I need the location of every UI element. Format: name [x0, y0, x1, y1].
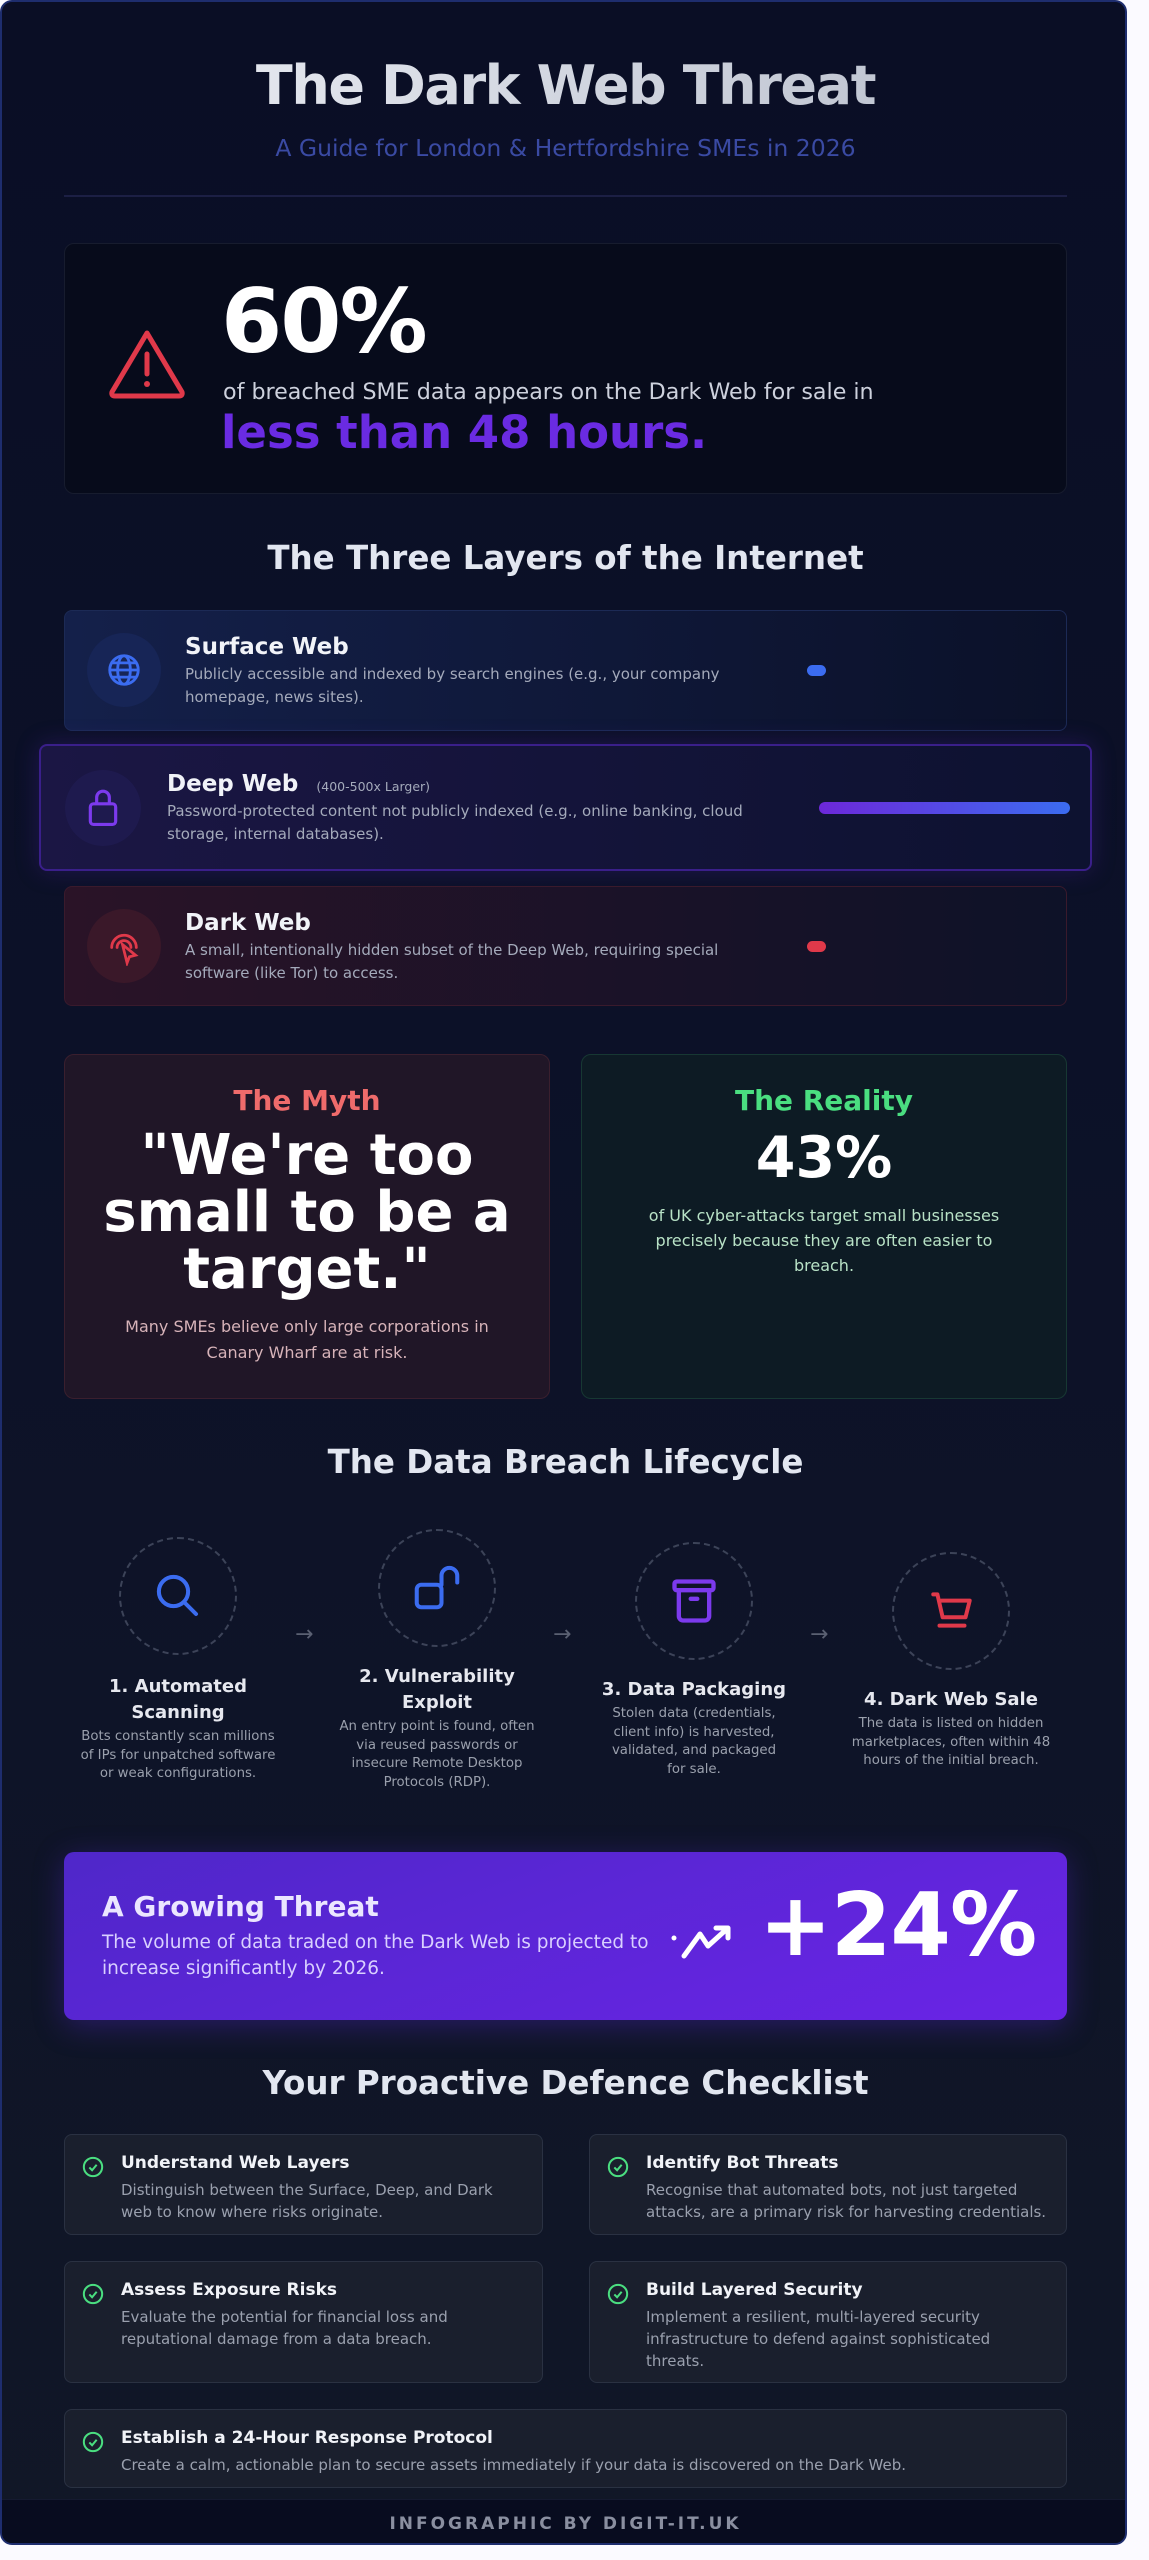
layer: dark web [64, 886, 1067, 1006]
growing threat title: A Growing Threat [102, 1890, 379, 1923]
icon: check [608, 2284, 628, 2304]
icon: check [82, 2156, 104, 2178]
reality description: of UK cyber-attacks target small businesses precisely because they are often easier to breach. [649, 1206, 999, 1275]
step 3: 3. Data Packaging [602, 1679, 786, 1700]
bar: deep size [819, 802, 1070, 814]
deep title: Deep Web (400-500x Larger) [167, 771, 430, 797]
panel: key stat [64, 243, 1067, 494]
step 4: The data is listed on hidden marketplaces, often within 48 hours of the initial breach. [852, 1716, 1050, 1768]
growth stat: +24% [759, 1874, 1036, 1976]
step 4: 4. Dark Web Sale [864, 1689, 1038, 1710]
step 1 [81, 1537, 275, 1781]
footer: INFOGRAPHIC BY DIGIT-IT.UK [389, 2514, 742, 2534]
reality heading: The Reality [735, 1084, 913, 1117]
stat highlight: less than 48 hours. [221, 406, 707, 459]
title: The Dark Web Threat [256, 54, 875, 117]
checklist item 3: Evaluate the potential for financial loss and reputational damage from a data breach. [121, 2308, 448, 2348]
layer: deep web [39, 744, 1092, 871]
icon: archive [635, 1542, 753, 1660]
checklist item 4 [589, 2261, 1067, 2383]
panel: growing threat [64, 1852, 1067, 2020]
stat text: of breached SME data appears on the Dark Web for sale in [223, 379, 874, 405]
icon: check [608, 2156, 628, 2178]
checklist item 4: Build Layered Security [646, 2280, 863, 2300]
icon: pointer [87, 909, 161, 983]
checklist item 1 [64, 2134, 543, 2235]
icon: globe [87, 633, 161, 707]
footer [2, 2499, 1129, 2547]
checklist item 2: Identify Bot Threats [646, 2153, 838, 2173]
bar: dark size [807, 941, 826, 952]
surface title: Surface Web [185, 634, 349, 660]
myth heading: The Myth [233, 1084, 381, 1117]
checklist item 5: Create a calm, actionable plan to secure assets immediately if your data is discovered on the Dark Web. [121, 2456, 906, 2474]
dark description: A small, intentionally hidden subset of the Deep Web, requiring special software (like Tor) to access. [185, 941, 718, 982]
myth description: Many SMEs believe only large corporations in Canary Wharf are at risk. [125, 1317, 489, 1362]
panel: reality [581, 1054, 1067, 1399]
growing threat description: The volume of data traded on the Dark Web is projected to increase significantly by 2026. [102, 1932, 649, 1979]
icon: check [82, 2432, 104, 2452]
checklist item 2: Recognise that automated bots, not just targeted attacks, are a primary risk for harvesting credentials. [646, 2181, 1046, 2221]
step 1: 1. Automated Scanning [109, 1676, 247, 1723]
arrow 1: → [295, 1622, 313, 1647]
checklist item 1: Understand Web Layers [121, 2153, 350, 2173]
heading: three layers: The Three Layers of the Internet [267, 539, 864, 577]
icon: cart [892, 1552, 1010, 1670]
icon: search [119, 1537, 237, 1655]
heading: checklist: Your Proactive Defence Checklist [262, 2064, 868, 2102]
arrow 3: → [810, 1622, 828, 1647]
stat number 60%: 60% [221, 270, 426, 373]
checklist item 3: Assess Exposure Risks [121, 2280, 337, 2300]
icon: lock [65, 770, 141, 846]
layer: surface web [64, 610, 1067, 731]
deep description: Password-protected content not publicly indexed (e.g., online banking, cloud storage, internal databases). [167, 802, 743, 843]
step 3: Stolen data (credentials, client info) is harvested, validated, and packaged for sale. [612, 1706, 776, 1776]
reality stat: 43% [756, 1125, 892, 1191]
step 1: Bots constantly scan millions of IPs for unpatched software or weak configurations. [81, 1729, 275, 1781]
subtitle: A Guide for London & Hertfordshire SMEs in 2026 [275, 134, 856, 162]
panel: myth [64, 1054, 550, 1399]
bar: surface size [807, 665, 826, 676]
icon: check [82, 2284, 104, 2304]
arrow 2: → [553, 1622, 571, 1647]
checklist item 3 [64, 2261, 543, 2383]
icon: warning triangle [109, 330, 185, 398]
checklist item 1: Distinguish between the Surface, Deep, and Dark web to know where risks originate. [121, 2181, 493, 2221]
step 2 [339, 1529, 535, 1790]
icon: trend [672, 1926, 730, 1958]
step 2: 2. Vulnerability Exploit [359, 1666, 515, 1713]
checklist item 4: Implement a resilient, multi-layered security infrastructure to defend against sophisticated threats. [646, 2308, 990, 2370]
step 2: An entry point is found, often via reused passwords or insecure Remote Desktop Protocols (RDP). [339, 1719, 535, 1790]
step 3 [602, 1542, 786, 1776]
checklist item 5: Establish a 24-Hour Response Protocol [121, 2428, 493, 2448]
checklist item 5 [64, 2409, 1067, 2488]
checklist item 2 [589, 2134, 1067, 2235]
title [2, 54, 1129, 117]
icon: open lock [378, 1529, 496, 1647]
myth quote: "We're too small to be a target." [103, 1123, 511, 1302]
heading: lifecycle: The Data Breach Lifecycle [328, 1443, 803, 1481]
step 4 [852, 1552, 1050, 1768]
surface description: Publicly accessible and indexed by search engines (e.g., your company homepage, news sites). [185, 665, 720, 706]
dark title: Dark Web [185, 910, 311, 936]
